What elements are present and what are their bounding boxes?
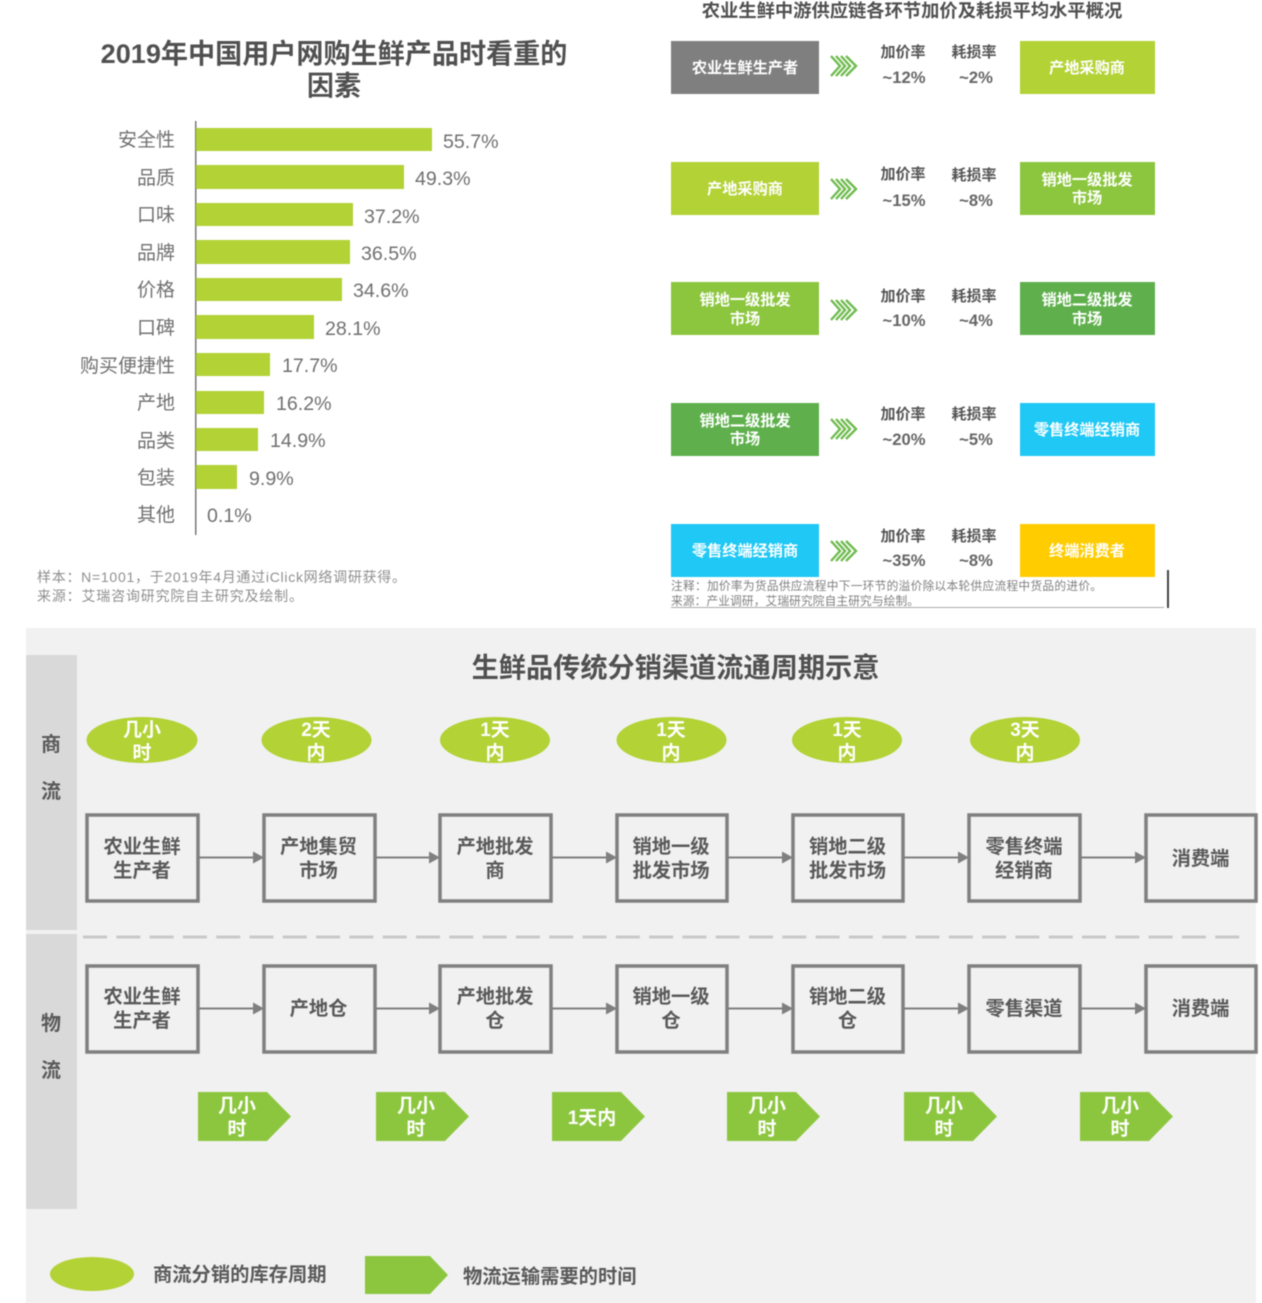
- row: 二级批发 to 零售: 耗损率: [951, 405, 997, 423]
- panel: bar chart of purchase factors: [37, 38, 567, 604]
- row: 一级批发 to 二级批发: ~4%: [959, 311, 993, 330]
- row: 二级批发 to 零售: [671, 403, 1155, 456]
- arrow: [375, 852, 440, 864]
- arrow: [551, 852, 617, 864]
- sidebar: 商流: 商: [41, 733, 61, 756]
- row: 采购商 to 一级批发: 耗损率: [951, 166, 997, 184]
- ellipse: 1天内: 1天: [480, 720, 510, 741]
- box: 消费端: [1146, 815, 1256, 901]
- row: 零售 to 消费者: 加价率: [880, 527, 926, 545]
- box: 销地一级批发市场: 销地一级: [632, 835, 710, 858]
- row: 采购商 to 一级批发: ~15%: [883, 191, 926, 210]
- bar: 包装 9.9%: 9.9%: [249, 468, 294, 490]
- pentagon: 几小时: 几小: [925, 1095, 963, 1117]
- row: 零售 to 消费者: 耗损率: [951, 527, 997, 545]
- bar: 产地 16.2%: [137, 391, 332, 415]
- sidebar: 物流: 流: [41, 1059, 61, 1082]
- box: 消费端: 消费端: [1172, 998, 1229, 1020]
- icon: chevrons: [831, 56, 856, 76]
- arrow: [198, 852, 264, 864]
- ellipse: 1天内: [440, 717, 550, 764]
- bar: 品牌 36.5%: 36.5%: [361, 243, 417, 265]
- legend: inventory cycle: 商流分销的库存周期: [153, 1264, 327, 1286]
- pentagon: 几小时: 时: [1110, 1118, 1130, 1140]
- row: 一级批发 to 二级批发: 销地一级批发: [699, 291, 791, 309]
- box: 销地二级仓: 仓: [838, 1010, 857, 1032]
- icon: chevrons: [831, 419, 856, 439]
- bar: 其他 0.1%: 0.1%: [207, 505, 252, 527]
- ellipse: 3天内: 内: [1015, 742, 1035, 764]
- box: 产地批发商: 商: [485, 860, 505, 882]
- row: 二级批发 to 零售: 市场: [730, 430, 760, 448]
- pentagon: 几小时: 几小: [218, 1095, 256, 1117]
- box: 农业生鲜生产者: 生产者: [113, 1010, 171, 1032]
- title: supply chain: 农业生鲜中游供应链各环节加价及耗损平均水平概况: [702, 0, 1122, 21]
- row: 零售 to 消费者: ~8%: [959, 551, 993, 570]
- bar: 品质 49.3%: 49.3%: [415, 168, 471, 190]
- arrow: [551, 1002, 617, 1014]
- pentagon: 几小时: 几小: [1101, 1095, 1139, 1117]
- row: 采购商 to 一级批发: 销地一级批发: [1041, 171, 1133, 189]
- bar: 安全性 55.7%: 安全性: [118, 129, 175, 151]
- bar: 口碑 28.1%: 28.1%: [325, 318, 381, 340]
- ellipse: 3天内: 3天: [1010, 720, 1040, 741]
- row: 二级批发 to 零售: ~5%: [959, 430, 993, 449]
- arrow: [375, 1002, 440, 1014]
- row: 采购商 to 一级批发: 市场: [1072, 189, 1102, 207]
- row: 零售 to 消费者: 零售终端经销商: [692, 542, 798, 560]
- box: 销地二级仓: [793, 966, 903, 1052]
- bar: 购买便捷性 17.7%: 17.7%: [282, 355, 338, 377]
- bar: 品牌 36.5%: [137, 240, 417, 265]
- bar: 口味 37.2%: [137, 203, 420, 228]
- box: 产地批发商: [440, 815, 551, 901]
- note border: [671, 570, 1169, 608]
- box: 农业生鲜生产者: 生产者: [113, 860, 171, 882]
- bar: 价格 34.6%: 价格: [137, 279, 175, 301]
- box: 产地仓: 产地仓: [290, 998, 347, 1020]
- chart source note: 样本：N=1001，于2019年4月通过iClick网络调研获得。: [37, 569, 406, 585]
- box: 零售渠道: 零售渠道: [985, 997, 1063, 1020]
- bar: 品质 49.3%: [137, 165, 471, 190]
- row: 生产者 to 采购商: 产地采购商: [1049, 59, 1125, 77]
- dashed divider: [83, 936, 1240, 938]
- pentagon: 几小时: 几小: [748, 1095, 786, 1117]
- box: 销地二级批发市场: 批发市场: [809, 859, 886, 882]
- icon: chevrons: [831, 300, 856, 320]
- pentagon: 几小时: 时: [227, 1118, 247, 1140]
- box: 农业生鲜生产者: [87, 966, 198, 1052]
- pentagon: 几小时: 时: [757, 1118, 777, 1140]
- logistics flow: [87, 966, 1256, 1052]
- box: 消费端: [1146, 966, 1256, 1052]
- bar: 口味 37.2%: 口味: [137, 204, 175, 226]
- row: 生产者 to 采购商: 耗损率: [951, 43, 997, 61]
- arrow: [727, 1002, 793, 1014]
- title: factors chart: 2019年中国用户网购生鲜产品时看重的: [101, 38, 567, 69]
- ellipse: 几小时: 时: [132, 742, 152, 764]
- transport time pentagons: [198, 1092, 1173, 1141]
- pentagon: 几小时: 时: [406, 1118, 426, 1140]
- row: 采购商 to 一级批发: 加价率: [880, 165, 926, 183]
- bar: 其他 0.1%: 其他: [137, 504, 175, 526]
- row: 一级批发 to 二级批发: ~10%: [883, 311, 926, 330]
- box: 零售终端经销商: [969, 815, 1080, 901]
- title: distribution cycle: 生鲜品传统分销渠道流通周期示意: [472, 652, 879, 683]
- title: factors chart: [101, 38, 567, 101]
- legend: inventory cycle: [50, 1257, 327, 1291]
- box: 销地二级批发市场: [793, 815, 903, 901]
- ellipse: 1天内: 内: [837, 742, 857, 764]
- row: 生产者 to 采购商: 农业生鲜生产者: [692, 59, 798, 77]
- row: 采购商 to 一级批发: 产地采购商: [707, 180, 783, 198]
- ellipse: 2天内: [262, 717, 372, 764]
- row: 采购商 to 一级批发: ~8%: [959, 191, 993, 210]
- sidebar: 物流: 物: [41, 1012, 61, 1035]
- bar: 品类 14.9%: [137, 428, 326, 452]
- row: 二级批发 to 零售: 销地二级批发: [699, 412, 791, 430]
- box: 消费端: 消费端: [1172, 848, 1229, 870]
- commerce flow: [87, 815, 1256, 901]
- arrow: [727, 852, 793, 864]
- box: 农业生鲜生产者: 农业生鲜: [103, 986, 181, 1008]
- box: 产地集贸市场: [264, 815, 375, 901]
- row: 生产者 to 采购商: ~12%: [883, 68, 926, 87]
- row: 一级批发 to 二级批发: 耗损率: [951, 287, 997, 305]
- row: 二级批发 to 零售: ~20%: [883, 430, 926, 449]
- box: 产地批发仓: 仓: [485, 1010, 505, 1032]
- row: 生产者 to 采购商: [671, 41, 1155, 94]
- bar: 口碑 28.1%: [137, 315, 381, 340]
- sidebar: 商流: [26, 655, 77, 930]
- ellipse: 3天内: [970, 717, 1080, 764]
- ellipse: 1天内: 内: [661, 742, 681, 764]
- pentagon: 几小时: [1080, 1092, 1173, 1141]
- box: 销地一级仓: 仓: [661, 1010, 681, 1032]
- box: 产地仓: [264, 966, 375, 1052]
- bar: 品质 49.3%: 品质: [137, 167, 175, 189]
- bar: 产地 16.2%: 产地: [137, 392, 175, 414]
- bar: 包装 9.9%: 包装: [137, 467, 175, 489]
- pentagon: 几小时: 时: [934, 1118, 954, 1140]
- pentagon: 几小时: [727, 1092, 820, 1141]
- title: factors chart: 因素: [307, 70, 361, 101]
- supply chain note: 注释：加价率为货品供应流程中下一环节的溢价除以本轮供应流程中货品的进价。: [671, 579, 1102, 593]
- pentagon: 几小时: 几小: [397, 1095, 435, 1117]
- box: 销地一级仓: [617, 966, 727, 1052]
- bar: 价格 34.6%: [137, 278, 409, 302]
- supply chain note: 来源：产业调研，艾瑞研究院自主研究与绘制。: [671, 594, 919, 608]
- bar: 品牌 36.5%: 品牌: [137, 242, 175, 264]
- box: 产地集贸市场: 产地集贸: [280, 836, 357, 858]
- legend: transport time: [365, 1256, 637, 1294]
- box: 零售渠道: [969, 966, 1080, 1052]
- box: 农业生鲜生产者: 农业生鲜: [103, 836, 181, 858]
- arrow: [1080, 852, 1146, 864]
- box: 销地二级批发市场: 销地二级: [809, 835, 886, 858]
- bar: 口味 37.2%: 37.2%: [364, 206, 420, 228]
- box: 零售终端经销商: 零售终端: [985, 836, 1063, 858]
- row: 采购商 to 一级批发: [671, 162, 1155, 215]
- row: 一级批发 to 二级批发: 加价率: [880, 287, 926, 305]
- row: 一级批发 to 二级批发: 销地二级批发: [1041, 291, 1133, 309]
- legend: [50, 1256, 637, 1294]
- arrow: [903, 1002, 969, 1014]
- bar: 产地 16.2%: 16.2%: [276, 393, 332, 415]
- icon: chevrons: [831, 179, 856, 199]
- ellipse: 1天内: [792, 717, 902, 764]
- bar: 安全性 55.7%: [118, 128, 499, 153]
- legend: transport time: 物流运输需要的时间: [463, 1265, 637, 1288]
- ellipse: 1天内: 1天: [832, 720, 862, 741]
- panel: distribution cycle: [26, 628, 1256, 1303]
- chart source note: 来源：艾瑞咨询研究院自主研究及绘制。: [37, 588, 303, 604]
- pentagon: 几小时: [904, 1092, 997, 1141]
- icon: chevrons: [831, 541, 856, 561]
- box: 产地批发仓: [440, 966, 551, 1052]
- ellipse: 1天内: [616, 717, 726, 764]
- row: 生产者 to 采购商: ~2%: [959, 68, 993, 87]
- ellipse: 1天内: 内: [485, 742, 505, 764]
- ellipse: 1天内: 1天: [656, 720, 686, 741]
- row: 一级批发 to 二级批发: 市场: [1072, 310, 1102, 328]
- ellipse: 2天内: 内: [306, 742, 326, 764]
- box: 销地一级仓: 销地一级: [632, 985, 710, 1008]
- panel background: [26, 628, 1256, 1303]
- row: 二级批发 to 零售: 零售终端经销商: [1034, 421, 1140, 439]
- supply chain note: [671, 579, 1102, 608]
- box: 产地集贸市场: 市场: [299, 859, 338, 882]
- pentagon: 1天内: 1天内: [568, 1107, 616, 1129]
- arrow: [903, 852, 969, 864]
- box: 零售终端经销商: 经销商: [995, 860, 1053, 882]
- box: 产地批发仓: 产地批发: [456, 985, 534, 1008]
- box: 销地一级批发市场: 批发市场: [632, 859, 710, 882]
- sidebar: 物流: [26, 934, 77, 1209]
- sidebar: 商流: 流: [41, 780, 61, 803]
- arrow: [1080, 1002, 1146, 1014]
- row: 零售 to 消费者: 终端消费者: [1049, 542, 1125, 560]
- pentagon: 几小时: [376, 1092, 469, 1141]
- box: 销地二级仓: 销地二级: [809, 985, 886, 1008]
- ellipse: 2天内: 2天: [301, 720, 331, 741]
- box: 产地批发商: 产地批发: [456, 835, 534, 858]
- bar: 品类 14.9%: 品类: [137, 430, 175, 452]
- bar: 购买便捷性 17.7%: [80, 353, 338, 377]
- row: 一级批发 to 二级批发: [671, 282, 1155, 335]
- bar: 包装 9.9%: [137, 465, 294, 490]
- ellipse: 几小时: [86, 717, 198, 764]
- arrow: [198, 1002, 264, 1014]
- pentagon: 几小时: [198, 1092, 291, 1141]
- bar: 口碑 28.1%: 口碑: [137, 317, 175, 339]
- bar: 安全性 55.7%: 55.7%: [443, 131, 499, 153]
- bar: 品类 14.9%: 14.9%: [270, 430, 326, 452]
- row: 二级批发 to 零售: 加价率: [880, 405, 926, 423]
- panel: supply chain markup and loss: [671, 0, 1169, 608]
- ellipse: 几小时: 几小: [123, 719, 161, 741]
- box: 销地一级批发市场: [617, 815, 727, 901]
- row: 零售 to 消费者: ~35%: [883, 551, 926, 570]
- bar: 价格 34.6%: 34.6%: [353, 280, 409, 302]
- chart source note: [37, 569, 406, 604]
- row: 生产者 to 采购商: 加价率: [880, 43, 926, 61]
- bar: 购买便捷性 17.7%: 购买便捷性: [80, 355, 175, 377]
- chart axis: [195, 121, 196, 535]
- inventory duration ellipses: [86, 717, 1080, 764]
- pentagon: 1天内: [552, 1092, 645, 1141]
- box: 农业生鲜生产者: [87, 815, 198, 901]
- bar: 其他 0.1%: [137, 504, 252, 527]
- row: 零售 to 消费者: [671, 524, 1155, 577]
- row: 一级批发 to 二级批发: 市场: [730, 310, 760, 328]
